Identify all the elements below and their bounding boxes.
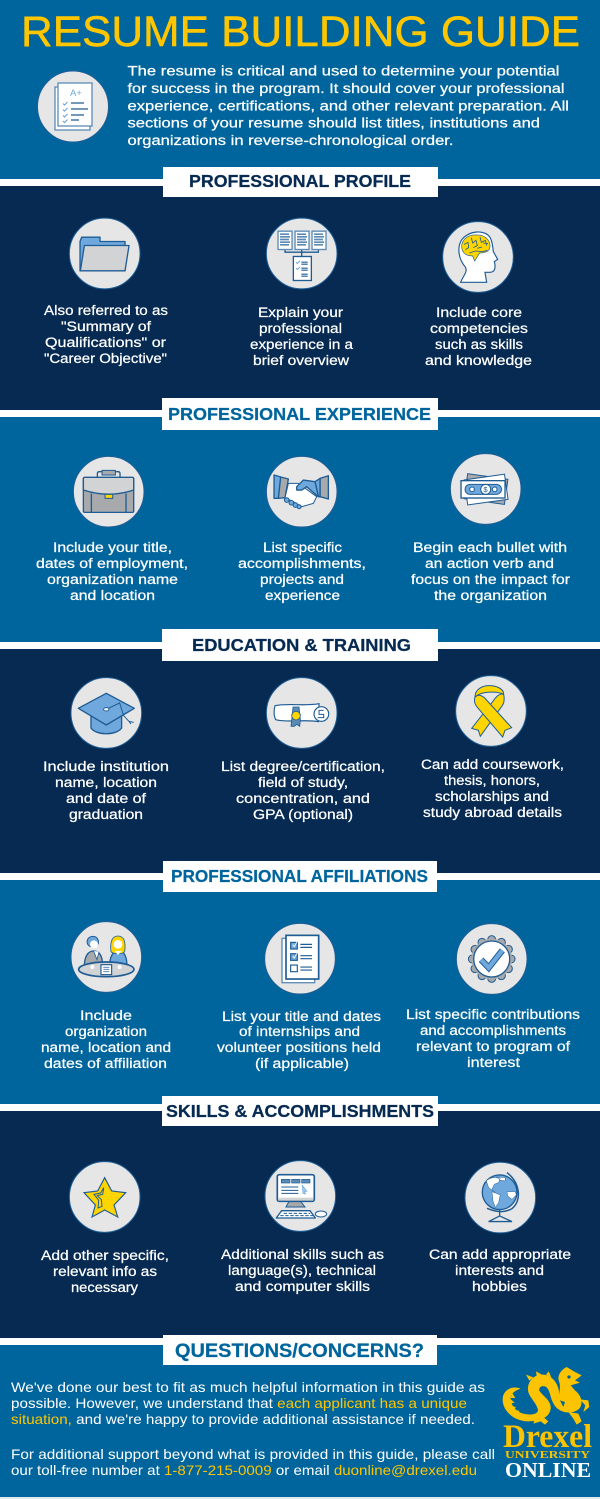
text: interests: hobbies [472, 1279, 527, 1295]
panel: skills and accomplishments [0, 1096, 600, 1339]
icon: badge check [456, 924, 527, 994]
text: additional skills: Additional skills such as [221, 1247, 384, 1263]
text: action verbs: the organization [434, 588, 547, 604]
heading: professional profile [163, 167, 438, 197]
text: internships: List your title and dates [222, 1009, 381, 1025]
text: institution: Include institution [43, 759, 169, 775]
logo: Drexel University Online: ONLINE [505, 1458, 591, 1482]
intro text block: sections of your resume should list titles, institutions and [128, 116, 540, 132]
text: competencies: competencies [430, 321, 528, 337]
logo: Drexel University Online: Drexel [503, 1419, 592, 1455]
heading: professional profile: PROFESSIONAL PROFILE [189, 171, 411, 191]
text: internships: volunteer positions held [217, 1040, 381, 1056]
text: coursework: scholarships and [435, 789, 549, 805]
text: action verbs: focus on the impact for [411, 572, 570, 588]
text: accomplishments: accomplishments, [238, 556, 366, 572]
text: action verbs: an action verb and [425, 556, 554, 572]
icon: dragon [503, 1367, 589, 1425]
heading: skills and accomplishments [162, 1096, 438, 1126]
panel: professional profile [0, 167, 600, 410]
text: institution: and date of [66, 791, 146, 807]
text: accomplishments: List specific [263, 540, 342, 556]
icon: briefcase [73, 456, 144, 527]
text: overview [250, 305, 353, 369]
icon: graduation cap [71, 678, 142, 748]
heading: professional affiliations: PROFESSIONAL AFFILIATIONS [171, 866, 428, 886]
text: contributions: interest [467, 1055, 520, 1071]
text: title and dates: dates of employment, [36, 556, 188, 572]
icon: handshake [266, 456, 337, 527]
text: degree: concentration, and [236, 791, 370, 807]
text: additional skills: language(s), technical [228, 1263, 376, 1279]
icon: checklist [265, 923, 335, 994]
text: assistance paragraph: We've done our best to fit as much helpful information in this guide as [11, 1379, 485, 1395]
text: summary [44, 303, 168, 367]
heading: questions and concerns: QUESTIONS/CONCERNS? [175, 1341, 424, 1362]
heading: education and training [162, 629, 438, 661]
text: organization: dates of affiliation [44, 1056, 167, 1072]
text: assistance paragraph [11, 1379, 485, 1427]
title: RESUME BUILDING GUIDE [21, 8, 580, 56]
text: overview: brief overview [253, 353, 350, 369]
intro text block: The resume is critical and used to determine your potential [128, 64, 560, 80]
text: degree: GPA (optional) [253, 807, 353, 823]
text: institution [43, 759, 169, 823]
icon: people at table [71, 922, 142, 992]
text: internships: of internships and [239, 1024, 360, 1040]
intro text block: for success in the program. It should cover your professional [128, 81, 564, 97]
text: additional skills: and computer skills [235, 1279, 370, 1295]
icon: money [450, 454, 521, 524]
text: title and dates [36, 540, 188, 604]
text: contact details: For additional support beyond what is provided in this guide, please call [11, 1446, 495, 1462]
icon: documents to checklist [266, 218, 337, 289]
text: interests: Can add appropriate [429, 1247, 571, 1263]
logo: Drexel University Online: UNIVERSITY [505, 1450, 591, 1461]
text: accomplishments [238, 540, 366, 604]
heading: education and training: EDUCATION & TRAINING [192, 635, 411, 655]
text: action verbs [411, 540, 570, 604]
text: specific info: necessary [71, 1280, 139, 1296]
text: specific info: relevant info as [53, 1264, 157, 1280]
text: organization: organization [65, 1024, 147, 1040]
text: contributions: and accomplishments [420, 1023, 566, 1039]
text: coursework [421, 757, 564, 821]
intro text block [128, 64, 569, 149]
text: overview: professional [259, 321, 342, 337]
text: summary: "Summary of [61, 319, 151, 335]
icon: diploma [266, 678, 337, 748]
icon: folder [69, 218, 140, 289]
text: action verbs: Begin each bullet with [413, 540, 567, 556]
icon: ribbon [456, 676, 526, 746]
text: summary: Qualifications" or [45, 335, 166, 351]
text: title and dates: organization name [47, 572, 178, 588]
text: title and dates: Include your title, [53, 540, 172, 556]
text: contact details [11, 1446, 495, 1478]
heading: skills and accomplishments: SKILLS & ACCOMPLISHMENTS [166, 1101, 434, 1121]
text: specific info [41, 1248, 169, 1296]
panel: education and training [0, 629, 600, 874]
heading: questions and concerns [163, 1335, 437, 1365]
text: assistance paragraph: situation, and we're happy to provide additional assistance if needed. [11, 1411, 475, 1427]
text: summary: Also referred to as [44, 303, 168, 319]
text: accomplishments: projects and [260, 572, 344, 588]
text: degree: List degree/certification, [221, 759, 385, 775]
text: summary: "Career Objective" [44, 351, 167, 367]
icon: computer [265, 1161, 336, 1231]
icon: star [69, 1162, 140, 1232]
intro text block: organizations in reverse-chronological order. [128, 133, 454, 149]
text: additional skills [221, 1247, 384, 1295]
text: competencies: such as skills [435, 337, 523, 353]
heading: professional experience: PROFESSIONAL EXPERIENCE [168, 404, 431, 424]
panel: professional experience [0, 398, 600, 642]
text: institution: name, location [55, 775, 157, 791]
heading: professional affiliations [163, 861, 437, 892]
text: internships: (if applicable) [255, 1056, 349, 1072]
text: organization [41, 1008, 171, 1072]
text: contributions [406, 1007, 580, 1071]
logo: Drexel University Online [503, 1367, 592, 1482]
text: contributions: List specific contributions [406, 1007, 580, 1023]
text: organization: name, location and [41, 1040, 171, 1056]
text: competencies: and knowledge [425, 353, 532, 369]
text: institution: graduation [69, 807, 143, 823]
text: assistance paragraph: possible. However, we understand that each applicant has a unique [11, 1395, 467, 1411]
text: contact details: our toll-free number at 1-877-215-0009 or email duonline@drexel.edu [11, 1462, 477, 1478]
text: organization: Include [80, 1008, 132, 1024]
panel: introduction [0, 0, 600, 181]
text: overview: Explain your [258, 305, 343, 321]
text: degree [221, 759, 385, 823]
icon: globe [465, 1162, 536, 1233]
text: interests: interests and [455, 1263, 544, 1279]
icon: graded resume document [38, 71, 108, 142]
text: accomplishments: experience [265, 588, 340, 604]
text: contributions: relevant to program of [416, 1039, 570, 1055]
intro text block: experience, certifications, and other relevant preparation. All [128, 98, 569, 114]
text: degree: field of study, [258, 775, 348, 791]
heading: professional experience [162, 398, 438, 430]
text: competencies: Include core [436, 305, 522, 321]
text: competencies [425, 305, 532, 369]
text: coursework: study abroad details [423, 805, 562, 821]
text: internships [217, 1009, 381, 1072]
text: overview: experience in a [250, 337, 353, 353]
panel: professional affiliations [0, 861, 600, 1105]
panel: questions and concerns [0, 1335, 600, 1499]
text: specific info: Add other specific, [41, 1248, 169, 1264]
text: title and dates: and location [70, 588, 155, 604]
text: coursework: Can add coursework, [421, 757, 564, 773]
icon: graded resume document: A+ [70, 88, 82, 99]
text: interests [429, 1247, 571, 1295]
icon: money: $ [483, 485, 488, 494]
icon: head with brain [443, 222, 513, 292]
text: coursework: thesis, honors, [444, 773, 540, 789]
